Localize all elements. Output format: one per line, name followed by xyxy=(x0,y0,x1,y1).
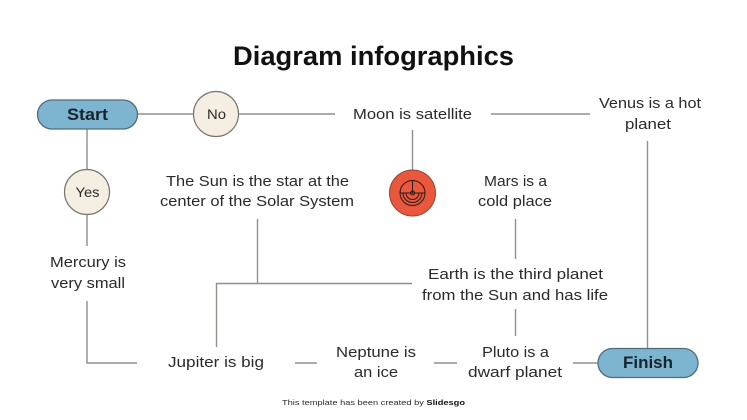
text: moon: Moon is satellite xyxy=(353,106,472,123)
finish pill xyxy=(598,348,698,378)
text: mercury: very small xyxy=(51,275,125,292)
text: jupiter: Jupiter is big xyxy=(168,354,264,371)
text: mars xyxy=(478,173,552,210)
text: earth: Earth is the third planet xyxy=(428,266,604,283)
start pill xyxy=(38,100,138,129)
no circle: No xyxy=(207,106,226,122)
text: mars: cold place xyxy=(478,193,552,210)
text: pluto: dwarf planet xyxy=(468,364,563,381)
text: sun xyxy=(160,173,354,210)
connector lines xyxy=(87,114,648,363)
text: pluto: Pluto is a xyxy=(482,344,550,361)
text: venus: Venus is a hot xyxy=(599,95,702,112)
text: venus: planet xyxy=(625,116,672,133)
text: earth xyxy=(422,266,608,304)
text: neptune: Neptune is xyxy=(336,344,416,361)
no circle xyxy=(194,92,238,136)
yes circle xyxy=(64,170,110,214)
icon: planet orbits xyxy=(390,170,436,216)
text: neptune xyxy=(336,344,416,381)
start pill: Start xyxy=(67,106,109,124)
finish pill: Finish xyxy=(623,354,673,372)
text: mercury xyxy=(50,254,126,292)
text: venus xyxy=(599,95,702,133)
text: mars: Mars is a xyxy=(484,173,548,190)
yes circle: Yes xyxy=(76,184,100,200)
text: mercury: Mercury is xyxy=(50,254,126,271)
footer credit: This template has been created by Slidesgo xyxy=(282,398,466,407)
text: earth: from the Sun and has life xyxy=(422,287,608,304)
text: pluto xyxy=(468,344,563,381)
text: sun: center of the Solar System xyxy=(160,193,354,210)
text: neptune: an ice xyxy=(354,364,398,381)
text: sun: The Sun is the star at the xyxy=(166,173,349,190)
title: Diagram infographics xyxy=(233,41,514,71)
